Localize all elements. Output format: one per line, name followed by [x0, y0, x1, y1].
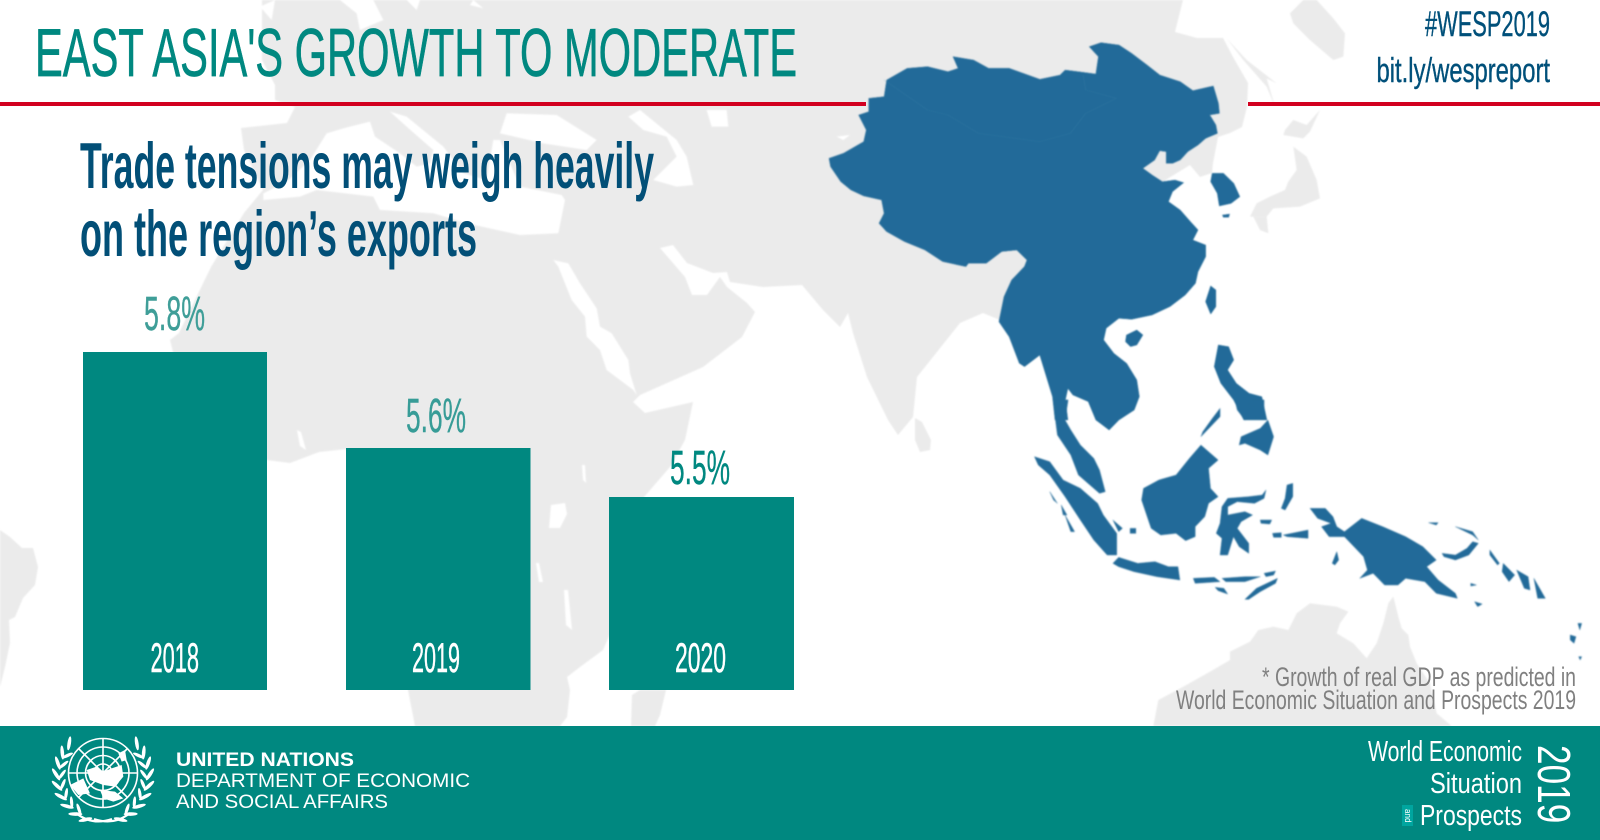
bar 2018: 5.8% — [144, 288, 205, 341]
bar 2020: 2020 — [675, 634, 726, 681]
WESP logotype: World Economic — [1368, 736, 1522, 768]
WESP logotype: 2019 — [1528, 745, 1580, 823]
subtitle — [80, 129, 654, 270]
bar 2018 — [83, 288, 267, 690]
WESP logotype: Prospects — [1420, 800, 1522, 832]
WESP logotype: Situation — [1430, 768, 1522, 800]
subtitle: Trade tensions may weigh heavily — [80, 129, 654, 202]
background world map — [0, 0, 1452, 726]
bar 2018: 2018 — [150, 634, 199, 681]
title: EAST ASIA'S GROWTH TO MODERATE — [35, 15, 797, 91]
footnote — [1176, 662, 1576, 715]
WESP logotype — [1368, 736, 1580, 832]
UN DESA wordmark: AND SOCIAL AFFAIRS — [176, 791, 388, 813]
bar 2020: 5.5% — [670, 442, 730, 495]
red rule, left segment — [0, 102, 866, 106]
subtitle: on the region’s exports — [80, 197, 477, 270]
bar 2019: 2019 — [412, 634, 460, 681]
highlighted region: East Asia map — [829, 43, 1582, 660]
bar 2019: 5.6% — [406, 390, 466, 443]
red rule, right segment — [1248, 102, 1600, 106]
bar chart: GDP growth — [83, 288, 794, 690]
footer band — [0, 726, 1600, 840]
bar 2019 — [346, 390, 530, 690]
UN DESA wordmark: DEPARTMENT OF ECONOMIC — [176, 770, 470, 792]
WESP logotype: and — [1403, 809, 1413, 823]
icon: UN emblem — [51, 736, 155, 823]
UN DESA wordmark: UNITED NATIONS — [176, 750, 354, 771]
UN DESA wordmark — [176, 750, 470, 813]
bar 2020 — [609, 442, 794, 690]
